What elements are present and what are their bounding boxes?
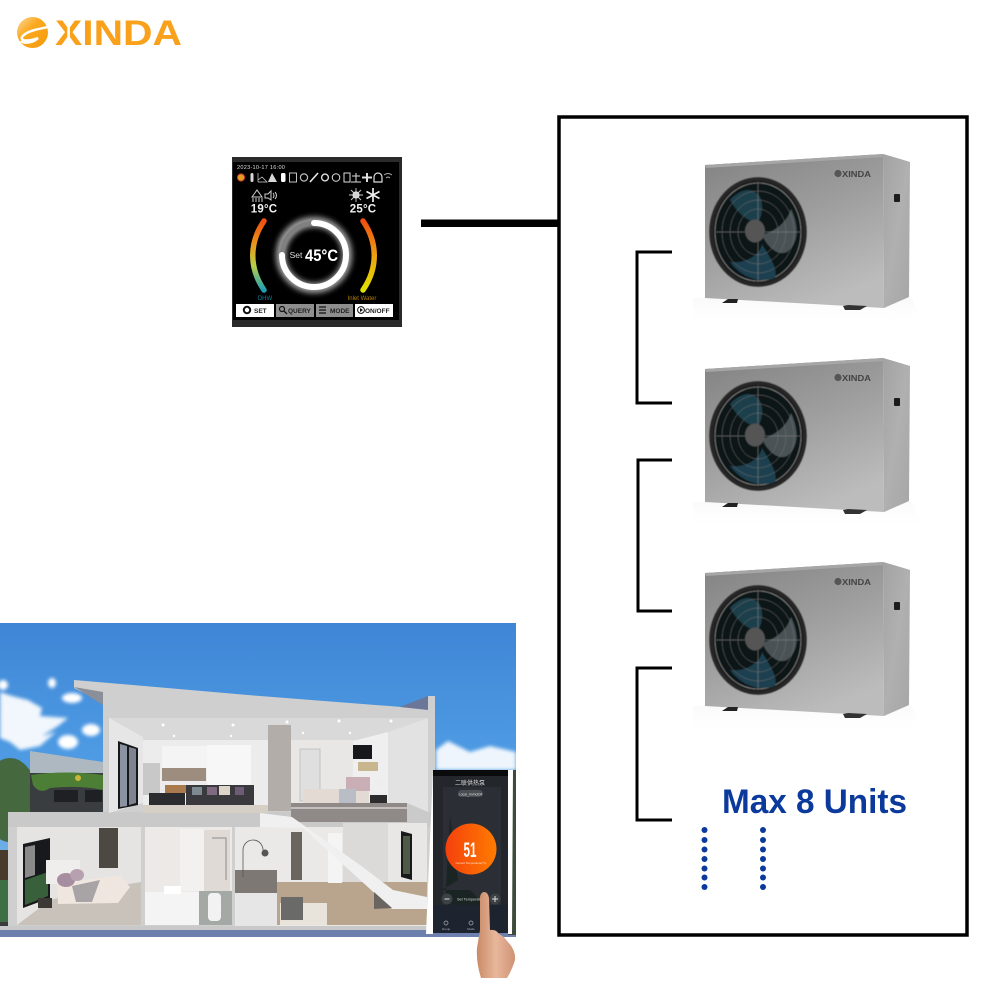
ground strip <box>0 926 516 937</box>
status date and time: 2023-10-17 16:00 <box>237 165 285 171</box>
inlet water gradient arc <box>363 221 374 290</box>
trees and garden <box>0 758 38 930</box>
logo: XINDA <box>17 14 182 53</box>
app title: 二联供热泵 <box>455 779 485 787</box>
setpoint dial: Set <box>290 250 303 260</box>
connector line from controller to units <box>421 220 558 227</box>
terrace with glass and hedge <box>30 751 103 813</box>
icon: sun and snowflake <box>349 188 380 202</box>
temperature circle <box>446 824 496 874</box>
bracket link 2 to 3 <box>638 460 672 611</box>
temperature circle: Current Temperature(°C) <box>456 861 486 865</box>
dotted continuation, right <box>760 827 766 890</box>
heat pump unit 2 <box>693 358 922 530</box>
button: MODE <box>316 304 353 317</box>
panel: house cutaway image <box>0 623 516 937</box>
button: SET <box>236 304 274 317</box>
staircase <box>260 813 427 909</box>
panel: smartphone app <box>426 770 513 934</box>
app device tag: Local_Invhot04 <box>459 792 482 796</box>
building shell <box>8 680 435 930</box>
set temperature controls: Set Temperature <box>457 898 485 902</box>
icon: pointing hand <box>477 892 515 978</box>
logo wordmark: XINDA <box>55 14 182 53</box>
app bottom nav: Group <box>442 927 450 931</box>
bracket link 1 to 2 <box>637 252 672 403</box>
button: ON/OFF: ON/OFF <box>365 308 390 315</box>
right garden backdrop <box>508 770 516 935</box>
set temperature controls <box>442 894 500 904</box>
heat pump unit 3 <box>693 562 922 734</box>
DHW label: DHW <box>258 296 272 302</box>
lower floor rooms <box>17 823 427 926</box>
panel: heat pump cascade frame <box>559 117 967 935</box>
label: Max 8 Units: Max 8 Units <box>722 783 907 821</box>
icon: shower and speaker <box>252 190 276 202</box>
button: ON/OFF <box>355 304 393 317</box>
DHW temperature: 19°C <box>251 204 277 216</box>
dotted continuation, left <box>702 827 708 890</box>
status icon row <box>237 173 392 182</box>
button: MODE: MODE <box>330 308 350 315</box>
button: SET: SET <box>254 308 267 315</box>
app bottom nav <box>442 921 475 931</box>
app device tag <box>458 790 483 797</box>
inlet water temperature: 25°C <box>350 204 376 216</box>
panel: wall controller <box>232 157 402 327</box>
DHW gradient arc <box>253 221 264 290</box>
temperature circle: 51 <box>464 839 477 862</box>
button: QUERY <box>276 304 314 317</box>
upper floor interior <box>109 718 428 826</box>
app bottom nav: Mode <box>467 927 475 931</box>
button: QUERY: QUERY <box>288 308 312 315</box>
icon: orange sphere <box>17 17 48 48</box>
inlet water label: Inlet Water <box>348 296 376 302</box>
bracket link 3 onward <box>637 668 672 820</box>
setpoint dial: 45°C <box>305 246 338 265</box>
setpoint dial <box>281 222 347 288</box>
heat pump unit 1 <box>693 154 922 326</box>
clouds <box>0 678 516 770</box>
